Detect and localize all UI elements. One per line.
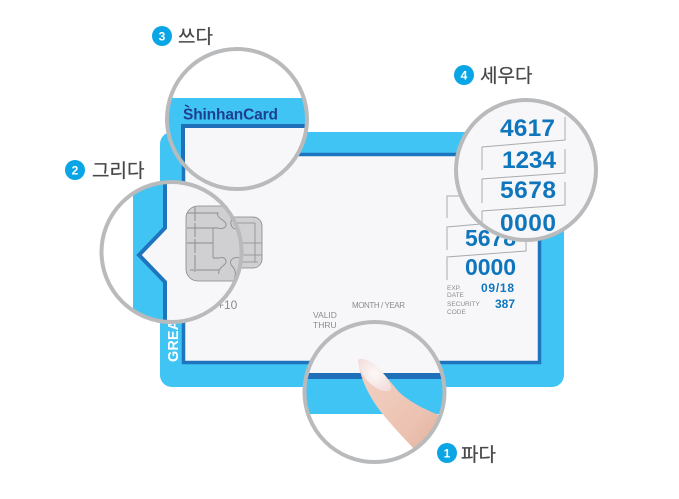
brand logo text: ShinhanCard xyxy=(183,106,278,124)
valid thru label: THRU xyxy=(313,320,337,330)
label 2: 그리다: 그리다 xyxy=(92,160,144,182)
label 3: 쓰다: 3 xyxy=(159,30,166,44)
label 1: 파다: 파다 xyxy=(461,444,496,466)
label 2: 그리다: 2 xyxy=(72,164,79,178)
label 4: 세우다: 4 xyxy=(461,68,468,82)
card number 0000: 0000 xyxy=(465,254,516,280)
logo mark xyxy=(185,105,189,107)
security label: CODE xyxy=(447,309,466,316)
card body xyxy=(160,132,564,387)
card xyxy=(160,132,564,387)
label 3: 쓰다: 쓰다 xyxy=(178,26,213,48)
card number boxes xyxy=(447,196,526,280)
label 2: 그리다 xyxy=(65,160,144,182)
label 4: 세우다: 세우다 xyxy=(480,65,532,87)
magnifier 4: card numbers xyxy=(456,100,596,240)
security label: SECURITY xyxy=(447,301,481,308)
expiry value: 09/18 xyxy=(481,281,514,295)
number 0000: 0000 xyxy=(500,210,556,237)
card number 5678: 5678 xyxy=(465,225,516,251)
card inner panel xyxy=(184,154,540,362)
label 4: 세우다 xyxy=(454,65,532,87)
magnifier 2: notch and chip xyxy=(100,180,244,324)
magnifier 3: brand name xyxy=(165,47,309,191)
number 5678: 5678 xyxy=(500,177,556,204)
small card number: +10 xyxy=(217,298,238,312)
label 3: 쓰다 xyxy=(152,26,213,48)
label 1: 파다 xyxy=(437,443,496,466)
magnified chip xyxy=(186,206,240,282)
fingernail xyxy=(358,359,391,391)
finger xyxy=(358,359,438,448)
security value: 387 xyxy=(495,297,515,311)
expiry label: DATE xyxy=(447,292,465,299)
brand text on card edge: GREAT xyxy=(166,312,182,362)
magnifier 1: finger xyxy=(302,320,446,464)
valid thru label: VALID xyxy=(313,310,337,320)
month year label: MONTH / YEAR xyxy=(352,301,405,310)
number 4617: 4617 xyxy=(500,115,555,142)
card chip xyxy=(205,217,262,268)
number 1234: 1234 xyxy=(502,147,556,174)
number box outlines xyxy=(482,117,566,222)
expiry label: EXP. xyxy=(447,285,461,292)
label 1: 파다: 1 xyxy=(444,446,451,460)
